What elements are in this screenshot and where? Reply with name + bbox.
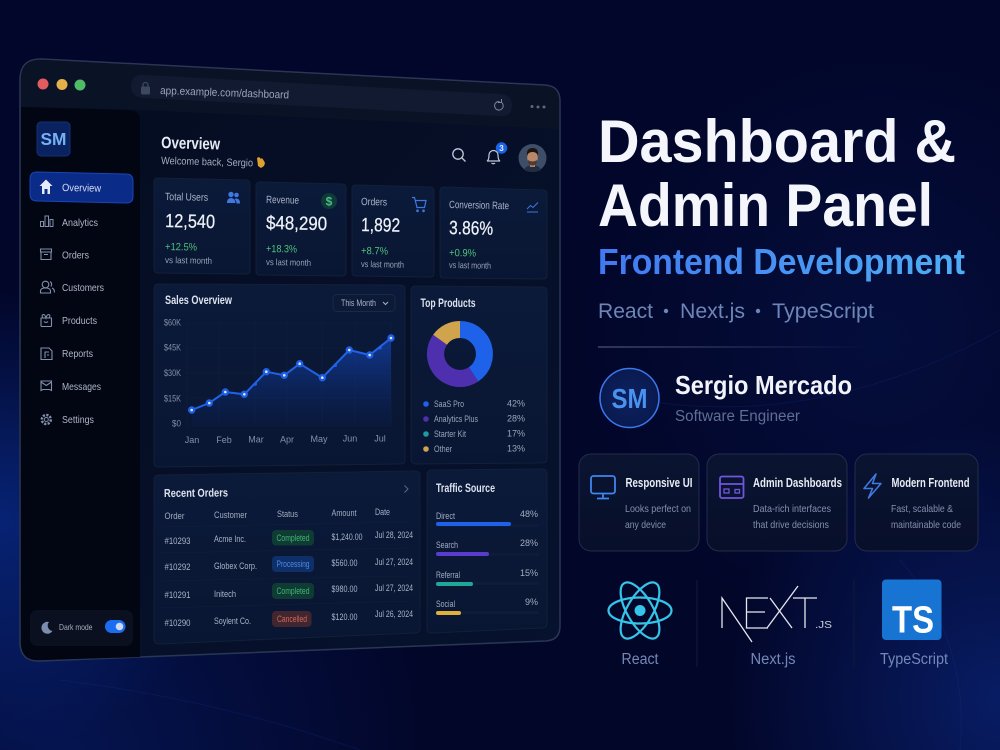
legend: SaaS Pro bbox=[434, 399, 464, 409]
stat card: Total Users: vs last month bbox=[165, 255, 212, 266]
panel: traffic source: Traffic Source bbox=[436, 483, 495, 495]
x axis labels: Feb bbox=[216, 435, 232, 445]
x axis labels: Jun bbox=[343, 434, 357, 444]
row: 10293: Acme Inc. bbox=[214, 534, 246, 545]
panel: recent orders table: Recent Orders bbox=[164, 487, 228, 500]
table header: Customer bbox=[214, 510, 247, 520]
panel: sales overview chart bbox=[154, 284, 405, 467]
stat card: Conversion Rate bbox=[440, 187, 547, 279]
divider bbox=[696, 580, 698, 667]
nav item: Orders: Orders bbox=[62, 250, 89, 262]
tech stack line bbox=[598, 299, 874, 323]
feature card: Modern Frontend: Modern Frontend bbox=[892, 476, 970, 490]
row: 10290: Jul 26, 2024 bbox=[375, 609, 413, 620]
feature card: Responsive UI: any device bbox=[625, 519, 666, 531]
legend: 42% bbox=[507, 398, 525, 408]
table header bbox=[164, 507, 390, 521]
feature card: Admin Dashboards: that drive decisions bbox=[753, 519, 829, 531]
feature card: Modern Frontend: Fast, scalable & bbox=[891, 503, 953, 515]
row: 10290: #10290 bbox=[164, 618, 190, 629]
avatar bbox=[518, 144, 546, 172]
bar: Search bbox=[436, 538, 539, 556]
tech stack line: React bbox=[598, 299, 653, 323]
window control dots bbox=[38, 78, 86, 90]
x axis labels bbox=[185, 434, 386, 445]
row: 10293: Jul 28, 2024 bbox=[375, 530, 413, 541]
nav item: Reports bbox=[41, 348, 93, 360]
data points bbox=[189, 336, 394, 412]
feature card: Admin Dashboards bbox=[707, 454, 847, 551]
stat card: Total Users bbox=[154, 178, 250, 274]
stat card: Revenue bbox=[256, 182, 346, 276]
icon: notification bell: 3 bbox=[499, 144, 504, 153]
address bar: app.example.com/dashboard bbox=[160, 85, 289, 102]
row: 10290: Soylent Co. bbox=[214, 616, 251, 627]
stat card: Total Users: Total Users bbox=[165, 191, 208, 204]
page header: Overview bbox=[161, 134, 220, 154]
bar: Direct: 48% bbox=[520, 509, 538, 519]
row: 10292: Processing bbox=[276, 559, 310, 569]
panel: top products bbox=[411, 286, 547, 464]
nav item: Settings bbox=[42, 414, 94, 426]
feature card: Responsive UI: Looks perfect on bbox=[625, 503, 691, 515]
address bar bbox=[131, 75, 512, 116]
bar: Social bbox=[436, 597, 539, 615]
feature card: Modern Frontend bbox=[855, 454, 978, 551]
stat card: Conversion Rate: +0.9% bbox=[449, 247, 476, 259]
author block: Sergio Mercado bbox=[675, 370, 852, 400]
feature card: Admin Dashboards: Admin Dashboards bbox=[753, 476, 842, 490]
row: 10292: #10292 bbox=[164, 562, 190, 573]
author logo circle: SM bbox=[612, 383, 648, 414]
row: 10292 bbox=[164, 556, 413, 573]
row: 10291: #10291 bbox=[164, 590, 190, 601]
row: 10291: Completed bbox=[276, 586, 310, 596]
author block: Software Engineer bbox=[675, 408, 800, 425]
stat card: Conversion Rate: vs last month bbox=[449, 260, 491, 271]
subtitle: Frontend Development: Frontend Development bbox=[598, 241, 965, 282]
feature card: Modern Frontend: maintainable code bbox=[891, 519, 961, 531]
bar: Search: Search bbox=[436, 540, 458, 550]
table header: Date bbox=[375, 507, 390, 517]
table header: Order bbox=[164, 511, 184, 521]
icon: dashboard window bbox=[720, 476, 744, 498]
row: 10291: $980.00 bbox=[332, 584, 358, 595]
panel: sidebar bbox=[21, 107, 140, 660]
donut chart bbox=[427, 321, 493, 387]
y axis labels: $30K bbox=[164, 368, 181, 378]
panel: recent orders table bbox=[154, 471, 420, 644]
bar: Direct: Direct bbox=[436, 511, 455, 521]
logo: React: React bbox=[622, 651, 659, 668]
browser title bar bbox=[21, 60, 559, 129]
row: 10293: #10293 bbox=[164, 536, 190, 547]
y axis labels: $60K bbox=[164, 318, 181, 328]
dropdown: This Month: This Month bbox=[341, 298, 376, 308]
y axis labels: $0 bbox=[172, 418, 181, 428]
icon: cart bbox=[412, 198, 426, 212]
x axis labels: May bbox=[310, 434, 328, 444]
page header bbox=[161, 134, 546, 172]
legend: Starter Kit bbox=[434, 429, 466, 439]
y axis labels: $45K bbox=[164, 342, 181, 352]
logo: Next.js: Next.js bbox=[750, 651, 796, 668]
legend bbox=[423, 398, 525, 454]
row: 10291: Initech bbox=[214, 589, 236, 600]
legend: 13% bbox=[507, 444, 525, 454]
logo: Next.js bbox=[722, 586, 832, 668]
legend: 28% bbox=[507, 414, 525, 424]
y axis labels bbox=[164, 318, 181, 428]
icon: dollar badge: $ bbox=[326, 194, 333, 208]
icon: monitor bbox=[591, 476, 615, 498]
stat card: Revenue: $48,290 bbox=[266, 213, 327, 235]
row: 10290: Cancelled bbox=[277, 614, 307, 624]
data line bbox=[192, 338, 391, 410]
stat card: Total Users: 12,540 bbox=[165, 211, 215, 233]
nav item active: Overview bbox=[30, 172, 133, 203]
stat card: Orders: +8.7% bbox=[361, 245, 388, 257]
dark mode toggle: Dark mode bbox=[59, 622, 93, 632]
stat card: Orders: 1,892 bbox=[361, 215, 400, 237]
stat card: Revenue: Revenue bbox=[266, 194, 299, 207]
stat card: Orders: vs last month bbox=[361, 259, 404, 270]
dashboard browser window bbox=[20, 59, 560, 661]
icon: waving hand bbox=[257, 157, 265, 168]
row: 10292: Globex Corp. bbox=[214, 561, 257, 572]
panel: sales overview chart: Sales Overview bbox=[165, 295, 232, 307]
logo: TypeScript: TypeScript bbox=[880, 651, 949, 668]
row: 10293: Completed bbox=[276, 533, 310, 543]
nav item: Analytics: Analytics bbox=[62, 217, 98, 229]
x axis labels: Apr bbox=[280, 434, 294, 444]
table header: Status bbox=[277, 509, 298, 519]
nav item: Messages bbox=[41, 381, 101, 393]
nav item: Products bbox=[41, 314, 97, 327]
dark mode toggle bbox=[30, 610, 133, 646]
icon: react atom bbox=[608, 577, 672, 644]
stat card: Revenue: vs last month bbox=[266, 257, 311, 268]
nav item: Products: Products bbox=[62, 315, 97, 327]
icon: moon bbox=[41, 622, 52, 634]
icon: search bbox=[453, 149, 466, 162]
row: 10292: $560.00 bbox=[332, 558, 358, 569]
divider bbox=[598, 346, 863, 348]
title: Dashboard & bbox=[598, 108, 956, 175]
legend: 17% bbox=[507, 428, 525, 438]
legend: Other bbox=[434, 444, 452, 454]
x axis labels: Jan bbox=[185, 435, 199, 445]
row: 10291: Jul 27, 2024 bbox=[375, 583, 413, 594]
area fill bbox=[192, 338, 391, 426]
divider bbox=[854, 580, 855, 667]
tech stack line: Next.js bbox=[680, 299, 745, 323]
bar: Referral: 15% bbox=[520, 568, 538, 578]
logo badge: SM bbox=[40, 129, 66, 149]
row: 10292: Jul 27, 2024 bbox=[375, 557, 413, 568]
nav item active: Overview: Overview bbox=[62, 182, 102, 195]
title: Admin Panel bbox=[598, 172, 933, 239]
icon: trend line bbox=[527, 202, 538, 212]
x axis labels: Jul bbox=[374, 434, 386, 444]
feature card: Admin Dashboards: Data-rich interfaces bbox=[753, 503, 831, 515]
icon: lightning bolt bbox=[864, 474, 881, 498]
stat card: Conversion Rate: Conversion Rate bbox=[449, 199, 509, 212]
bar: Referral bbox=[436, 568, 539, 586]
icon: refresh bbox=[495, 99, 503, 110]
icon: lock bbox=[142, 82, 150, 94]
row: 10293 bbox=[164, 530, 413, 547]
table rows bbox=[164, 530, 413, 629]
legend: Analytics Plus bbox=[434, 414, 478, 424]
icon: notification bell bbox=[487, 142, 507, 164]
nav item: Orders bbox=[40, 249, 89, 262]
stat card: Revenue: +18.3% bbox=[266, 243, 297, 256]
bar: Social: 9% bbox=[525, 597, 538, 607]
window menu dots bbox=[530, 105, 546, 108]
window frame bbox=[20, 59, 560, 661]
logo: Next.js: .JS bbox=[815, 620, 832, 631]
author logo circle bbox=[600, 368, 659, 428]
panel: top products: Top Products bbox=[420, 298, 476, 310]
table header: Amount bbox=[332, 508, 357, 518]
author block bbox=[600, 368, 852, 428]
row: 10290: $120.00 bbox=[332, 612, 358, 623]
icon: users bbox=[227, 192, 240, 204]
feature card: Responsive UI: Responsive UI bbox=[626, 476, 692, 490]
nav item: Analytics bbox=[40, 216, 98, 229]
bar: Referral: Referral bbox=[436, 570, 460, 580]
row: 10291 bbox=[164, 583, 413, 601]
line chart bbox=[164, 318, 394, 445]
row: 10290 bbox=[164, 609, 413, 629]
title bbox=[598, 108, 956, 239]
logo: TypeScript: TS bbox=[892, 600, 934, 642]
nav item: Messages: Messages bbox=[62, 381, 101, 393]
bar: Search: 28% bbox=[520, 538, 538, 548]
nav item: Customers: Customers bbox=[62, 282, 104, 294]
logo badge bbox=[37, 122, 70, 156]
bar: Social: Social bbox=[436, 599, 455, 609]
feature card: Responsive UI bbox=[579, 454, 699, 551]
nav item: Reports: Reports bbox=[62, 348, 93, 360]
stat card: Orders: Orders bbox=[361, 196, 387, 209]
nav item: Customers bbox=[40, 281, 104, 294]
nav item: Settings: Settings bbox=[62, 414, 94, 426]
icon: chevron bbox=[404, 486, 408, 492]
row: 10293: $1,240.00 bbox=[332, 532, 362, 543]
y axis labels: $15K bbox=[164, 394, 181, 404]
panel: traffic source bbox=[427, 469, 547, 633]
stat card: Conversion Rate: 3.86% bbox=[449, 218, 493, 240]
stat card: Orders bbox=[352, 185, 434, 277]
logo: React bbox=[608, 577, 672, 668]
bar: Direct bbox=[436, 509, 539, 527]
tech stack line: TypeScript bbox=[772, 299, 874, 323]
logo: TypeScript bbox=[880, 580, 949, 668]
stat card: Total Users: +12.5% bbox=[165, 241, 197, 254]
icon: Next wordmark bbox=[722, 586, 817, 642]
page header: Welcome back, Sergio bbox=[161, 155, 253, 169]
x axis labels: Mar bbox=[248, 434, 264, 444]
icon: home bbox=[40, 180, 52, 194]
dropdown: This Month bbox=[333, 294, 395, 312]
